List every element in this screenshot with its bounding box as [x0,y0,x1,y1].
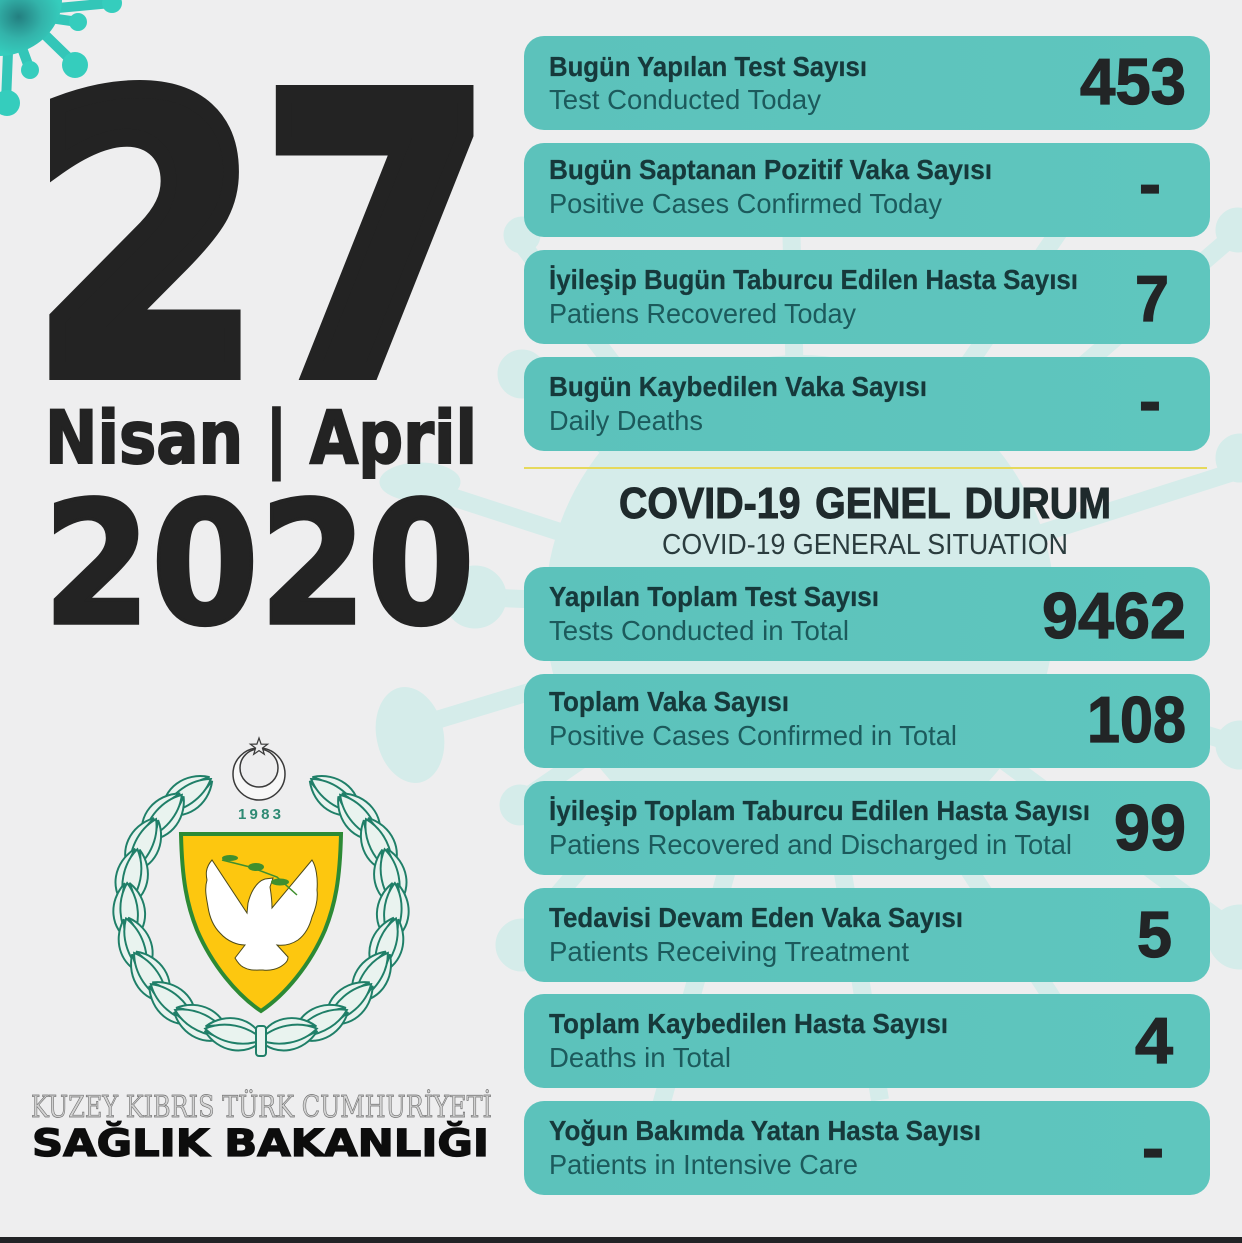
ministry name: ministry: SAĞLIK BAKANLIĞI [32,1121,489,1165]
emblem shield [181,834,341,1011]
panel: tests today [524,36,1210,130]
emblem dove [206,860,317,970]
panel: total recovered: Patiens Recovered and Discharged in Total [549,829,1072,860]
panel: total tests [524,567,1210,661]
ministry name: country: KUZEY KIBRIS TÜRK CUMHURİYETİ [31,1089,492,1125]
panel: tests today: 453 [1080,45,1186,118]
panel: deaths today: Bugün Kaybedilen Vaka Sayısı [549,371,927,402]
emblem olive branch [222,855,297,895]
panel: positive cases today: Positive Cases Confirmed Today [549,188,942,219]
panel: total cases: 108 [1087,683,1186,756]
heading: general situation: COVID-19 GENEL DURUM [619,479,1111,528]
panel: deaths today: - [1139,364,1161,437]
panel: total deaths [524,994,1210,1088]
panel: positive cases today: Bugün Saptanan Pozitif Vaka Sayısı [549,154,992,185]
panel: recovered today [524,250,1210,344]
footer bar [0,1237,1242,1243]
panel: tests today: Test Conducted Today [549,84,821,115]
panel: total cases: Toplam Vaka Sayısı [549,686,789,717]
panel: total recovered: İyileşip Toplam Taburcu Edilen Hasta Sayısı [549,795,1090,826]
panel: intensive care: Yoğun Bakımda Yatan Hasta Sayısı [549,1115,981,1146]
panel: total deaths: 4 [1135,1004,1173,1077]
panel: total recovered: 99 [1114,791,1186,864]
panel: total cases [524,674,1210,768]
emblem wreath [110,766,412,1056]
panel: positive cases today: - [1139,147,1161,220]
panel: total tests: Tests Conducted in Total [549,615,849,646]
panel: total tests: Yapılan Toplam Test Sayısı [549,581,879,612]
divider [524,467,1207,469]
panel: recovered today: İyileşip Bugün Taburcu Edilen Hasta Sayısı [549,264,1078,295]
panel: under treatment: Patients Receiving Treatment [549,936,909,967]
panel: total recovered [524,781,1210,875]
date: day number: 27 [31,18,492,461]
emblem crescent and star [233,738,285,800]
icon: virus top-left corner [0,0,122,116]
panel: recovered today: Patiens Recovered Today [549,298,856,329]
date: month: Nisan | April [45,396,477,481]
panel: under treatment: Tedavisi Devam Eden Vaka Sayısı [549,902,963,933]
panel: total tests: 9462 [1042,579,1186,652]
panel: recovered today: 7 [1135,262,1169,335]
panel: intensive care [524,1101,1210,1195]
panel: intensive care: Patients in Intensive Care [549,1149,858,1180]
panel: intensive care: - [1142,1111,1164,1184]
emblem: ministry coat of arms [110,738,412,1056]
panel: total deaths: Toplam Kaybedilen Hasta Sayısı [549,1008,948,1039]
panel: total cases: Positive Cases Confirmed in Total [549,720,957,751]
subheading: general situation: COVID-19 GENERAL SITUATION [662,529,1068,561]
panel: deaths today: Daily Deaths [549,405,703,436]
panel: under treatment: 5 [1137,898,1172,971]
emblem year: 1983 [238,806,281,823]
panel: total deaths: Deaths in Total [549,1042,731,1073]
panel: deaths today [524,357,1210,451]
panel: positive cases today [524,143,1210,237]
panel: tests today: Bugün Yapılan Test Sayısı [549,51,867,82]
date: year: 2020 [43,466,475,664]
icon: large faint virus watermark [368,170,1242,1180]
panel: under treatment [524,888,1210,982]
